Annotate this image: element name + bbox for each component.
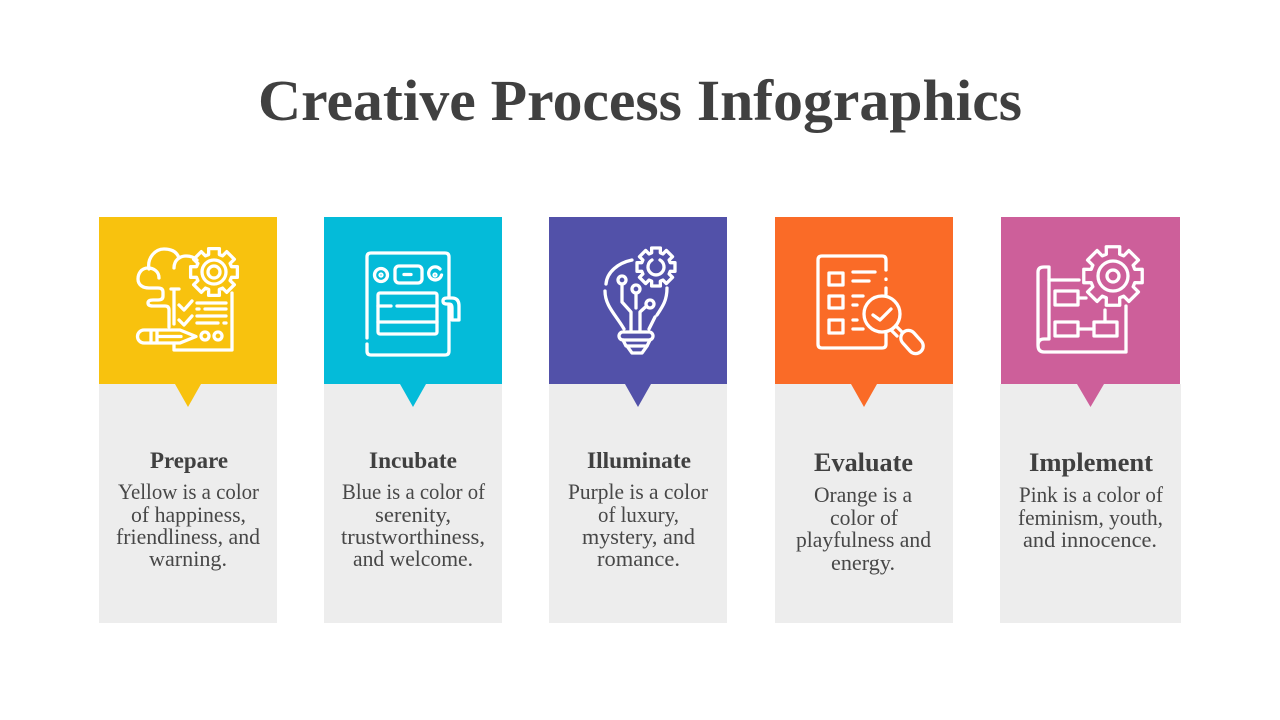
card background: prepare: [99, 384, 277, 623]
body text: incubate: and welcome.: [353, 546, 473, 571]
body text: illuminate: Purple is a color: [568, 479, 709, 504]
card background: illuminate: [549, 384, 727, 623]
body text: evaluate: [796, 482, 931, 575]
panel: evaluate: [775, 217, 953, 623]
pointer: blue: [400, 384, 426, 407]
icon: control panel machine: [367, 253, 459, 355]
body text: incubate: serenity,: [375, 502, 451, 527]
icon: cloud, gear, checklist and pencil: [138, 249, 237, 350]
heading: Implement: Implement: [1029, 448, 1153, 477]
body text: incubate: trustworthiness,: [341, 524, 485, 549]
body text: illuminate: [568, 479, 709, 571]
card background: incubate: [324, 384, 502, 623]
body text: illuminate: of luxury,: [598, 502, 679, 527]
colour header: yellow: [99, 217, 277, 384]
body text: incubate: [341, 479, 486, 571]
body text: evaluate: Orange is a: [814, 482, 912, 507]
body text: implement: Pink is a color of: [1019, 482, 1164, 507]
body text: evaluate: energy.: [831, 550, 895, 575]
card background: implement: [1000, 384, 1181, 623]
colour header: blue: [324, 217, 502, 384]
heading: Evaluate: Evaluate: [814, 448, 913, 477]
body text: implement: feminism, youth,: [1018, 505, 1163, 530]
heading: Prepare: Prepare: [150, 448, 228, 473]
body text: evaluate: color of: [830, 505, 899, 530]
pointer: orange: [851, 384, 877, 407]
icon: light bulb with gear and circuit: [605, 248, 675, 353]
body text: prepare: warning.: [149, 546, 227, 571]
body text: implement: and innocence.: [1023, 527, 1157, 552]
icon: blueprint with gear: [1038, 247, 1142, 352]
icon: checklist with magnifying glass: [818, 256, 926, 357]
panel: implement: [1000, 217, 1181, 623]
colour header: orange: [775, 217, 953, 384]
body text: illuminate: romance.: [597, 546, 680, 571]
pointer: yellow: [175, 384, 201, 407]
pointer: pink: [1077, 384, 1104, 407]
panel: illuminate: [549, 217, 727, 623]
body text: illuminate: mystery, and: [582, 524, 695, 549]
panel: incubate: [324, 217, 502, 623]
body text: prepare: Yellow is a color: [118, 479, 260, 504]
heading: Incubate: Incubate: [369, 448, 457, 473]
colour header: purple: [549, 217, 727, 384]
title: Creative Process Infographics: [258, 68, 1022, 133]
body text: implement: [1018, 482, 1164, 552]
body text: prepare: friendliness, and: [116, 524, 260, 549]
body text: prepare: of happiness,: [131, 502, 246, 527]
panel: prepare: [99, 217, 277, 623]
body text: incubate: Blue is a color of: [342, 479, 486, 504]
pointer: purple: [625, 384, 651, 407]
card background: evaluate: [775, 384, 953, 623]
heading: Illuminate: Illuminate: [587, 448, 691, 473]
body text: evaluate: playfulness and: [796, 527, 931, 552]
body text: prepare: [116, 479, 260, 571]
colour header: pink: [1001, 217, 1180, 384]
